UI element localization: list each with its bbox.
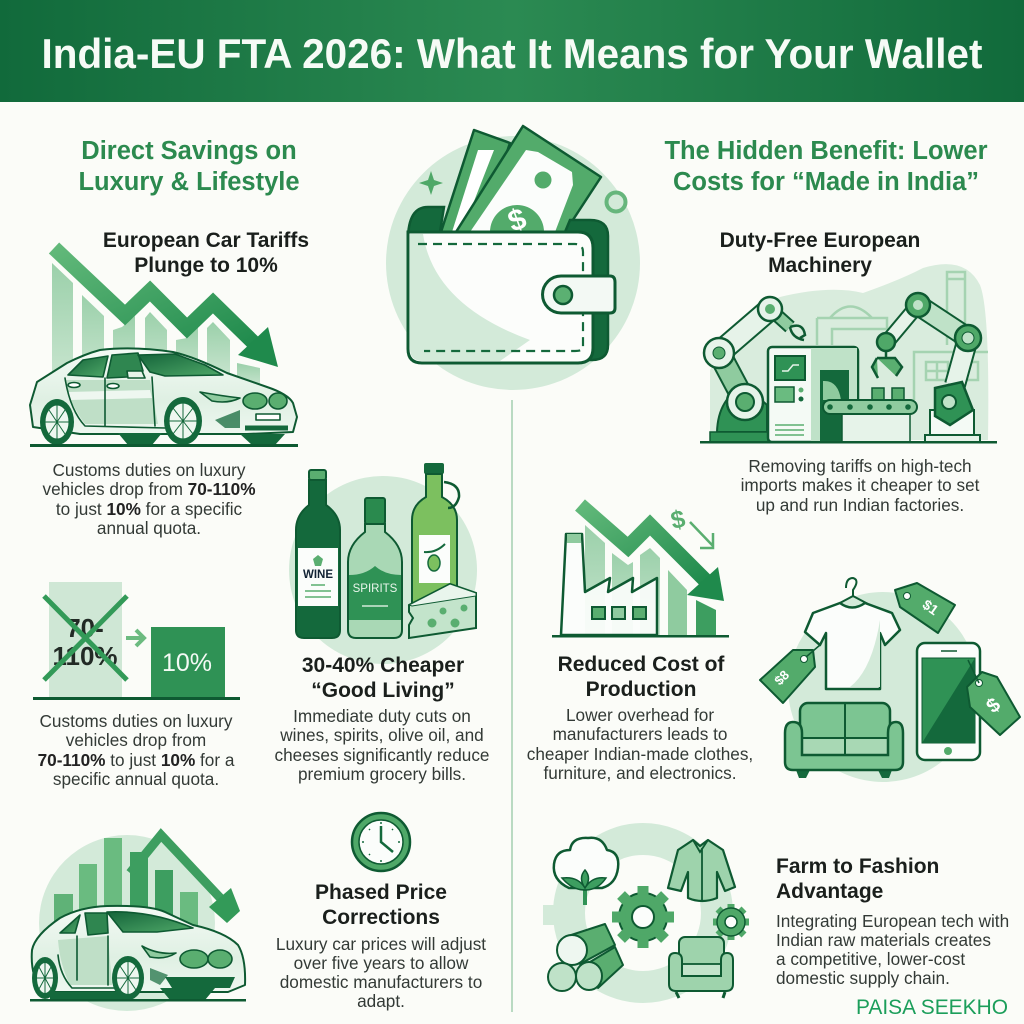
body text: machinery: imports makes it cheaper to set <box>741 475 980 495</box>
body text: good living: wines, spirits, olive oil, and <box>279 725 484 745</box>
heading: phased price corrections <box>315 881 447 929</box>
illustration: supply chain gear cycle <box>543 838 749 1000</box>
body text: reduced cost: manufacturers leads to <box>553 724 727 744</box>
icon: small gear <box>713 904 749 940</box>
body text: good living: Immediate duty cuts on <box>293 706 471 726</box>
body text: customs duties repeat: vehicles drop from <box>66 730 206 750</box>
heading: machinery: Machinery <box>768 254 872 277</box>
car wheels <box>32 956 144 1000</box>
icon: price tag right <box>967 660 1020 735</box>
heading: farm to fashion: Farm to Fashion <box>776 855 939 878</box>
body text: customs duties repeat: Customs duties on luxury <box>40 711 233 731</box>
background factory outline <box>817 272 988 400</box>
body text: farm to fashion: a competitive, lower-cost <box>776 949 965 969</box>
heading: hidden benefit: Costs for “Made in India” <box>673 168 979 196</box>
icon: dollar down arrow: $ <box>668 505 688 535</box>
icon: price tag left <box>760 645 820 703</box>
body text: phased corrections: adapt. <box>357 991 405 1011</box>
icon: cheese wedge <box>409 584 476 638</box>
icon: cotton plant <box>554 838 618 905</box>
illustration: cheaper goods with price tags <box>760 578 1020 782</box>
body text: customs duties: to just 10% for a specific <box>56 499 242 519</box>
icon: wine bottle <box>296 470 340 638</box>
illustration: wine spirits olive oil cheese <box>289 463 477 664</box>
icon: back banknote <box>441 130 510 232</box>
icon: sofa <box>785 703 903 778</box>
left robot arm <box>704 297 805 442</box>
icon: sparkle and ring <box>419 171 626 212</box>
body text: reduced cost: furniture, and electronics. <box>544 763 736 783</box>
arrow: price decline <box>130 835 240 923</box>
illustration: luxury car side view <box>30 348 298 447</box>
car wheels <box>40 397 202 445</box>
heading: direct savings <box>78 137 300 196</box>
heading: reduced cost: Reduced Cost of <box>558 653 725 676</box>
bar chart: falling prices <box>54 838 198 934</box>
icon: price tag right: $ <box>982 694 1005 718</box>
icon: price tag left: $8 <box>771 667 792 688</box>
icon: large gear <box>612 886 674 948</box>
bar chart: falling tariffs <box>52 263 260 385</box>
icon: olive oil bottle <box>412 463 459 610</box>
heading: machinery: Duty-Free European <box>720 229 920 252</box>
illustration: luxury car front view <box>30 906 246 1002</box>
icon: spirits bottle: SPIRITS <box>353 583 398 595</box>
body text: good living: premium grocery bills. <box>298 764 466 784</box>
right robot arm <box>872 293 981 442</box>
body text: farm to fashion: Integrating European tech with <box>776 911 1009 931</box>
icon: t-shirt on hanger <box>805 578 900 689</box>
arrow: falling trend <box>54 248 278 367</box>
heading: good living: “Good Living” <box>311 679 455 702</box>
icon: wine bottle: WINE <box>303 569 333 581</box>
chart: 70-110% to 10% <box>33 582 240 700</box>
conveyor belt <box>823 388 917 442</box>
body text: reduced cost: cheaper Indian-made clothes, <box>527 744 753 764</box>
icon: price tag top: $1 <box>920 596 942 618</box>
arrow: falling costs <box>580 505 724 601</box>
illustration: factory with falling costs <box>552 505 729 638</box>
panel: european car tariffs <box>30 229 309 538</box>
panel: duty-free machinery <box>700 229 997 515</box>
body text: farm to fashion: Indian raw materials creates <box>776 930 991 950</box>
heading: phased price corrections: Corrections <box>322 906 440 929</box>
chart: 70-110% to 10%: 110% <box>52 641 118 671</box>
icon: front banknote: $ <box>504 202 531 239</box>
heading: good living: 30-40% Cheaper <box>302 654 464 677</box>
icon: long-sleeve shirt <box>668 840 735 901</box>
heading: machinery <box>720 229 920 277</box>
brand logo: PAISA SEEKHO <box>856 996 1008 1019</box>
body text: customs duties: Customs duties on luxury <box>53 460 246 480</box>
body text: machinery: Removing tariffs on high-tech <box>748 456 972 476</box>
body text: phased corrections: over five years to allow <box>294 953 469 973</box>
panel: reduced cost of production <box>527 505 753 783</box>
icon: wallet clasp <box>543 276 615 313</box>
heading: hidden benefit <box>664 137 988 196</box>
icon: stacked logs <box>548 924 623 991</box>
panel: farm to fashion <box>543 838 1009 1000</box>
heading: car tariffs: Plunge to 10% <box>134 254 278 277</box>
body text: customs duties: vehicles drop from 70-110% <box>42 479 256 499</box>
icon: dollar down arrow <box>668 505 713 548</box>
heading: reduced cost: Production <box>586 678 696 701</box>
icon: price tag top <box>895 583 955 633</box>
body text: phased corrections: Luxury car prices will adjust <box>276 934 486 954</box>
body text: farm to fashion: domestic supply chain. <box>776 968 950 988</box>
icon: smartphone <box>917 643 980 760</box>
icon: clock <box>352 813 410 871</box>
heading: phased price corrections: Phased Price <box>315 881 447 904</box>
panel: duty comparison <box>33 582 240 789</box>
heading: farm to fashion: Advantage <box>776 880 883 903</box>
title: India-EU FTA 2026: What It Means for Your Wallet <box>42 30 983 77</box>
heading: car tariffs: European Car Tariffs <box>103 229 309 252</box>
illustration: robotic factory line <box>700 264 997 444</box>
icon: spirits bottle <box>348 498 402 638</box>
heading: good living <box>302 654 464 702</box>
body text: reduced cost: Lower overhead for <box>566 705 714 725</box>
icon: armchair <box>669 937 733 998</box>
body text: phased corrections: domestic manufacturers to <box>280 972 482 992</box>
heading: direct savings: Direct Savings on <box>81 137 297 165</box>
body text: customs duties repeat: specific annual quota. <box>53 769 219 789</box>
control machine <box>768 347 858 442</box>
chart: 70-110% to 10%: 10% <box>162 649 212 677</box>
chart: 70-110% to 10%: 70- <box>66 613 104 643</box>
heading: farm to fashion <box>776 855 939 903</box>
heading: hidden benefit: The Hidden Benefit: Lower <box>664 137 988 165</box>
title banner <box>0 0 1024 102</box>
illustration: car with falling bars <box>30 835 246 1011</box>
panel: phased price corrections <box>30 813 486 1011</box>
heading: reduced cost <box>558 653 725 701</box>
body text: customs duties: annual quota. <box>97 518 201 538</box>
icon: factory <box>561 534 657 635</box>
icon: front banknote <box>456 126 601 239</box>
panel: good living <box>275 463 489 784</box>
heading: car tariffs <box>103 229 309 277</box>
body text: good living: cheeses significantly reduce <box>275 745 489 765</box>
heading: direct savings: Luxury & Lifestyle <box>78 168 300 196</box>
icon: wallet with cash <box>386 126 640 390</box>
body text: customs duties repeat: 70-110% to just 10% for a <box>38 750 234 770</box>
body text: machinery: up and run Indian factories. <box>756 495 964 515</box>
